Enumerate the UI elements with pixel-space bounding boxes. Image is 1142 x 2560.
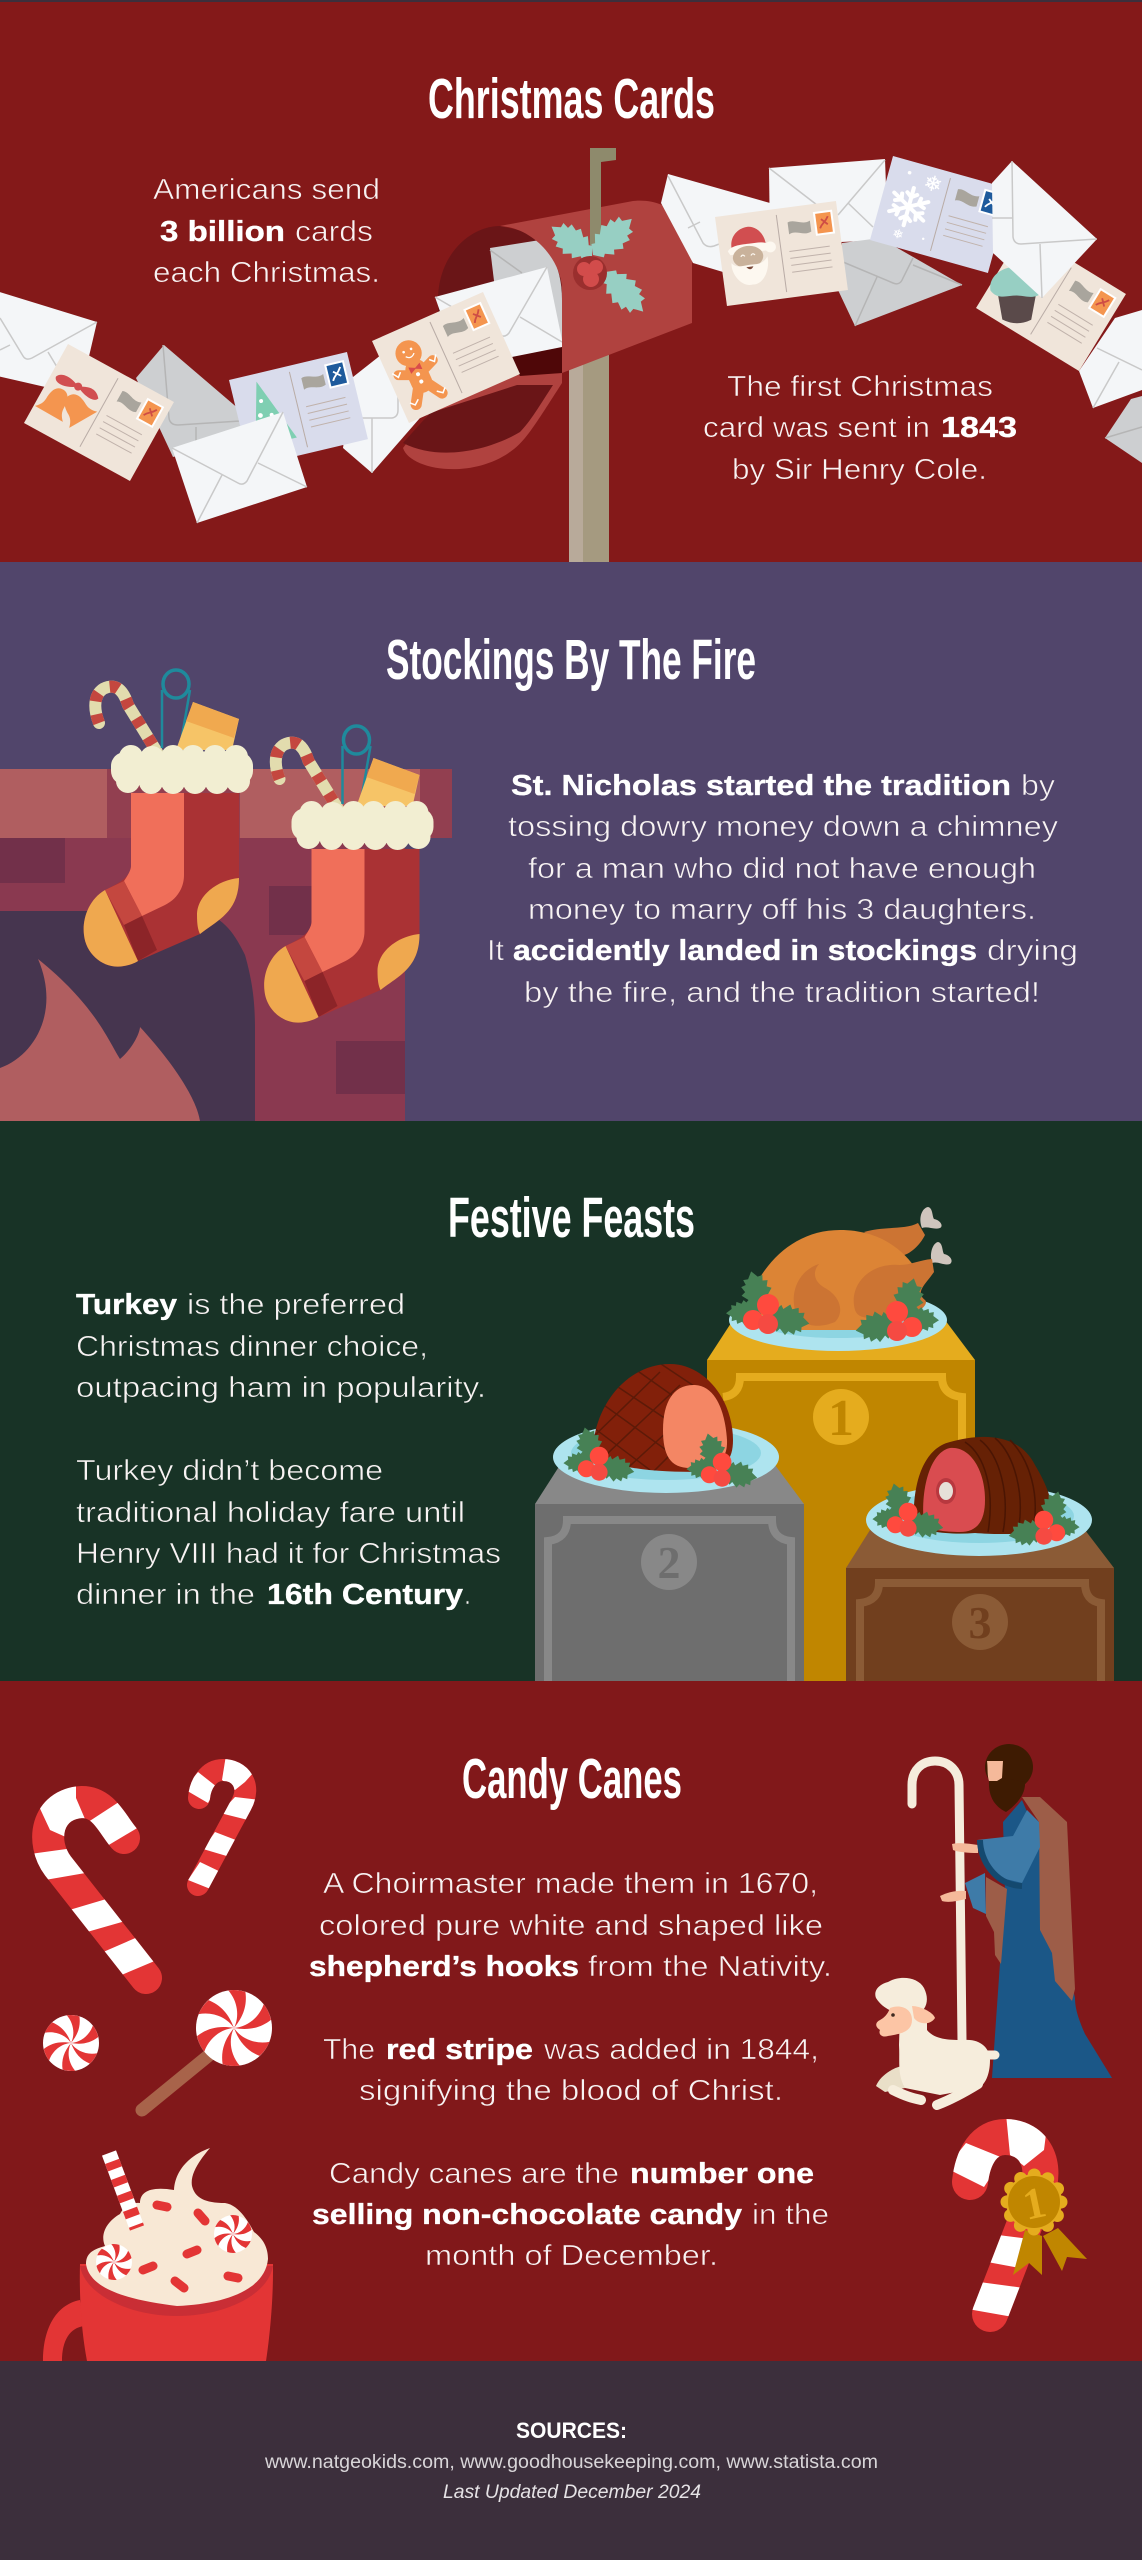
text: turkey preferred: Turkey	[76, 1289, 177, 1321]
text: st nicholas story: drying	[987, 935, 1078, 967]
envelope: white front left	[172, 412, 307, 523]
chimney wall	[0, 838, 405, 1121]
text: red stripe: signifying the blood of Christ.	[359, 2075, 783, 2107]
text: turkey preferred: Christmas dinner choice,	[76, 1331, 428, 1363]
podium: third place bronze: 3	[968, 1597, 992, 1648]
text: first christmas card: by Sir Henry Cole.	[732, 454, 987, 486]
text: number one candy: Candy canes are the	[329, 2158, 619, 2190]
top strip	[0, 0, 1142, 2]
heading: festive feasts: Festive Feasts	[448, 1186, 695, 1250]
heading: christmas cards: Christmas Cards	[428, 67, 715, 131]
envelope: white top	[769, 159, 888, 245]
text: st nicholas story: money to marry off his 3 daughters.	[528, 894, 1036, 926]
panel: candy canes	[0, 1681, 1142, 2361]
podium: third place bronze	[846, 1530, 1114, 1681]
postcard: cupcake	[959, 222, 1126, 376]
text: red stripe: was added in 1844,	[543, 2034, 819, 2066]
postcard: santa	[715, 201, 848, 306]
envelope: white right edge	[1079, 310, 1142, 408]
text: red stripe: The	[323, 2034, 375, 2066]
icon: hot cocoa mug	[43, 2148, 273, 2361]
text: red stripe: red stripe	[386, 2034, 533, 2066]
text: first christmas card: card was sent in	[703, 412, 930, 444]
panel background	[0, 562, 1142, 1121]
text: turkey preferred: outpacing ham in popularity.	[76, 1372, 486, 1404]
mantel shelf	[0, 769, 452, 838]
text: 3 billion cards: each Christmas.	[153, 257, 380, 289]
heading: stockings by the fire: Stockings By The Fire	[386, 628, 756, 692]
podium: second place silver	[535, 1465, 804, 1681]
panel: sources footer	[0, 2361, 1142, 2560]
mailbox open interior and door	[403, 226, 562, 469]
envelope: white behind santa	[661, 174, 770, 280]
envelope: gray right	[838, 238, 962, 326]
icon: large candy cane	[30, 1778, 157, 1979]
postcard: bells	[12, 337, 174, 481]
ribbon rosette: 1	[1018, 2177, 1050, 2230]
panel: stockings by the fire	[0, 562, 1142, 1121]
text: henry viii: traditional holiday fare until	[76, 1497, 465, 1529]
text: 3 billion cards: Americans send	[153, 174, 380, 206]
icon: peppermint	[42, 2015, 100, 2071]
postcard: tree	[229, 352, 368, 467]
sources heading: SOURCES:	[516, 2418, 627, 2443]
text: st nicholas story: St. Nicholas started the tradition	[511, 770, 1011, 802]
fireplace opening	[0, 911, 255, 1121]
podium: second place silver: 2	[658, 1537, 680, 1588]
text: choirmaster: A Choirmaster made them in 1670,	[323, 1868, 818, 1900]
ribbon rosette	[1006, 2174, 1087, 2275]
flame	[0, 959, 200, 1121]
stocking two	[264, 726, 434, 1023]
panel: festive feasts	[0, 1121, 1142, 1681]
postcard: snowflake	[870, 156, 1011, 273]
text: st nicholas story: by the fire, and the tradition started!	[524, 977, 1040, 1009]
panel background	[0, 2, 1142, 562]
heading: candy canes: Candy Canes	[462, 1747, 682, 1811]
panel: christmas cards	[0, 2, 1142, 562]
envelope: white behind lavender postcard	[340, 340, 440, 473]
holly on mailbox	[542, 207, 655, 323]
mailbox body	[500, 201, 692, 373]
text: first christmas card: 1843	[941, 412, 1017, 444]
text: henry viii: .	[464, 1579, 471, 1611]
postcard: gingerbread	[372, 292, 520, 423]
mailbox post	[569, 355, 609, 562]
stocking one	[84, 670, 253, 967]
panel background	[0, 1121, 1142, 1681]
envelope: gray in mailbox	[490, 240, 562, 345]
envelope: white far left	[0, 286, 97, 395]
source urls: www.natgeokids.com, www.goodhousekeeping.com, www.statista.com	[264, 2452, 878, 2473]
ham platter	[553, 1360, 779, 1493]
envelope: large white right	[992, 161, 1097, 298]
text: number one candy: month of December.	[425, 2240, 718, 2272]
text: st nicholas story: for a man who did not have enough	[528, 853, 1036, 885]
roast platter	[866, 1437, 1092, 1556]
text: st nicholas story: It	[487, 935, 504, 967]
envelope: white in mailbox	[435, 267, 562, 358]
text: first christmas card: The first Christmas	[727, 371, 993, 403]
text: 3 billion cards: cards	[295, 216, 373, 248]
podium: first place gold	[707, 1320, 975, 1681]
text: turkey preferred: is the preferred	[187, 1289, 405, 1321]
text: st nicholas story: tossing dowry money down a chimney	[508, 811, 1059, 843]
icon: small candy cane	[184, 1755, 260, 1890]
footer background	[0, 2361, 1142, 2560]
text: number one candy: number one	[630, 2158, 814, 2190]
panel background	[0, 1681, 1142, 2361]
mailbox flag	[590, 148, 616, 245]
text: number one candy: selling non-chocolate candy	[312, 2199, 742, 2231]
icon: award candy cane	[946, 2114, 1087, 2317]
envelope: gray left	[136, 345, 240, 457]
text: 3 billion cards: 3 billion	[160, 216, 285, 248]
turkey platter	[726, 1207, 952, 1351]
icon: shepherd with staff	[912, 1744, 1112, 2078]
text: choirmaster: shepherd’s hooks	[309, 1951, 579, 1983]
envelope: gray right edge	[1105, 396, 1142, 463]
text: choirmaster: colored pure white and shaped like	[319, 1910, 823, 1942]
text: henry viii: Turkey didn’t become	[76, 1455, 383, 1487]
text: number one candy: in the	[752, 2199, 829, 2231]
text: st nicholas story: by	[1021, 770, 1056, 802]
icon: sheep	[875, 1978, 995, 2105]
text: henry viii: 16th Century	[267, 1579, 463, 1611]
text: henry viii: Henry VIII had it for Christmas	[76, 1538, 501, 1570]
icon: lollipop	[142, 1990, 273, 2110]
text: henry viii: dinner in the	[76, 1579, 255, 1611]
podium: first place gold: 1	[828, 1390, 854, 1447]
text: choirmaster: from the Nativity.	[588, 1951, 832, 1983]
last updated: Last Updated December 2024	[443, 2482, 701, 2503]
chimney bricks	[0, 838, 405, 1094]
text: st nicholas story: accidently landed in stockings	[513, 935, 977, 967]
